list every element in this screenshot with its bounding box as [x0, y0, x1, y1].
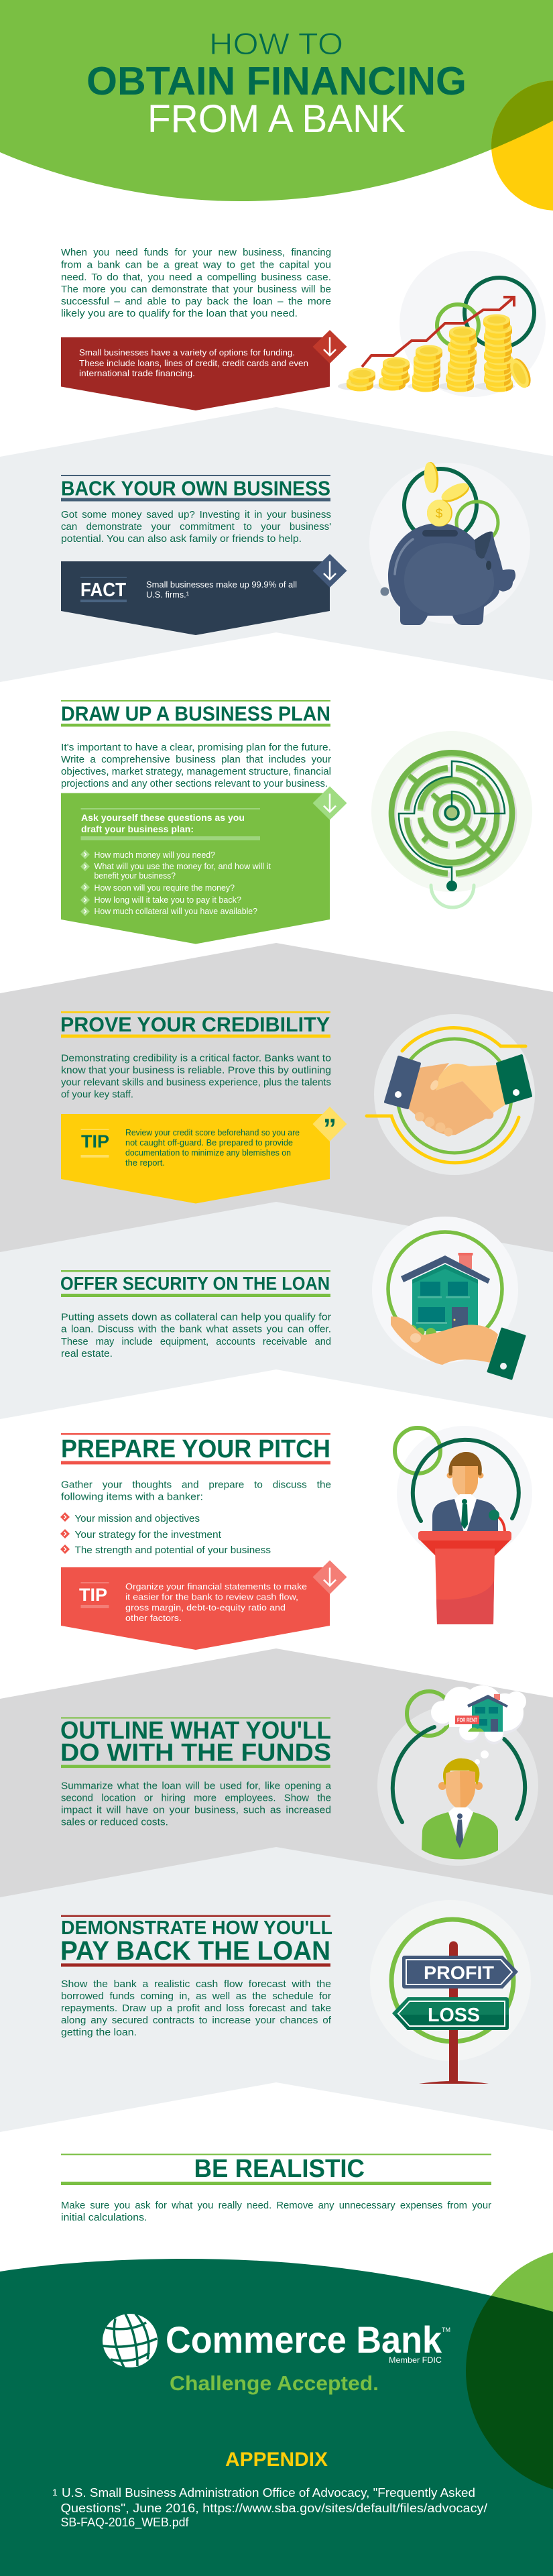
callout: questions checklist: Ask yourself these questions as you [81, 812, 245, 823]
body text: repayments. Draw up a profit and loss forecast and take [61, 2003, 331, 2014]
body text: know that your business is reliable. Prove this by outlining [61, 1065, 331, 1076]
callout: funding options: Small businesses have a variety of options for funding. [79, 347, 295, 357]
body text: It's important to have a clear, promising plan for the future. [61, 742, 331, 753]
panel: prove your credibility [60, 1011, 535, 1203]
callout: funding options: These include loans, lines of credit, credit cards and even [79, 358, 308, 368]
body text: Make sure you ask for what you really need. Remove any unnecessary expenses from your [61, 2200, 491, 2211]
callout: questions checklist: What will you use the money for, and how will it [94, 861, 271, 871]
icon: profit and loss signpost [370, 1900, 531, 2084]
bullet list: The strength and potential of your business [75, 1545, 271, 1556]
body text [61, 1053, 331, 1100]
intro text: When you need funds for your new business, financing [61, 247, 331, 258]
heading: PAY BACK THE LOAN [60, 1936, 330, 1966]
callout: tip credit score [61, 1107, 347, 1203]
body text: second location or hiring more employees. Show the [61, 1793, 331, 1804]
body text: following items with a banker: [61, 1492, 203, 1502]
callout: questions checklist: benefit your business? [94, 871, 176, 881]
panel: demonstrate how you'll pay back the loan [60, 1900, 531, 2084]
body text [61, 742, 331, 789]
body text: Demonstrating credibility is a critical factor. Banks want to [61, 1053, 331, 1064]
heading: BE REALISTIC [194, 2155, 365, 2183]
icon: profit and loss signpost: LOSS [428, 2005, 480, 2026]
body text: potential. You can also ask family or friends to help. [61, 534, 302, 545]
intro text: from a bank can be a great way to get the capital you [61, 260, 331, 271]
body text [61, 2200, 491, 2223]
body text: a loan. Discuss with the bank what assets you can offer. [61, 1324, 331, 1335]
callout: questions checklist: How much money will you need? [94, 850, 215, 860]
title [86, 27, 467, 141]
title: OBTAIN FINANCING [86, 59, 467, 103]
callout: tip credit score: the report. [125, 1158, 165, 1168]
callout: tip financial statements [61, 1560, 347, 1650]
bullet list [60, 1512, 271, 1556]
panel: introduction [61, 247, 546, 410]
heading: DEMONSTRATE HOW YOU'LL [61, 1917, 332, 1939]
heading: DRAW UP A BUSINESS PLAN [61, 702, 330, 726]
body text [61, 1781, 332, 1828]
callout: tip financial statements: Organize your financial statements to make [125, 1581, 307, 1591]
heading [60, 1717, 331, 1768]
icon: house in hand [372, 1217, 525, 1379]
intro text: The more you can demonstrate that your business will be [61, 284, 331, 295]
callout: funding options: international trade financing. [79, 368, 195, 378]
body text: These may include equipment, accounts receivable and [61, 1337, 331, 1347]
body text: objectives, market strategy, management structure, financial [61, 767, 331, 777]
callout: tip credit score: documentation to minimize any blemishes on [125, 1147, 291, 1158]
panel: prepare your pitch [60, 1426, 532, 1650]
callout: tip credit score: ” [323, 1114, 336, 1143]
body text: Gather your thoughts and prepare to discuss the [61, 1479, 331, 1490]
callout: questions checklist: How long will it take you to pay it back? [94, 895, 241, 905]
logo: Commerce Bank: Challenge Accepted. [170, 2371, 379, 2395]
icon: man thinking of rental house [377, 1685, 538, 1866]
heading: PREPARE YOUR PITCH [61, 1435, 330, 1463]
appendix heading: APPENDIX [225, 2449, 328, 2471]
body text: real estate. [61, 1349, 113, 1359]
heading: BACK YOUR OWN BUSINESS [61, 476, 330, 500]
body text [61, 1979, 332, 2038]
intro text [61, 247, 331, 319]
body text: of your key staff. [61, 1089, 133, 1100]
heading: OFFER SECURITY ON THE LOAN [60, 1273, 330, 1294]
icon: man thinking of rental house: FOR RENT [457, 1717, 477, 1724]
callout: fact: U.S. firms.¹ [146, 590, 190, 600]
callout: tip financial statements: TIP [79, 1585, 107, 1605]
footnote: SB-FAQ-2016_WEB.pdf [60, 2516, 189, 2530]
logo: Commerce Bank: Commerce Bank [166, 2318, 442, 2361]
body text [61, 1312, 331, 1359]
intro text: need. To do that, you need a compelling business case. [61, 272, 331, 283]
bullet list: Your strategy for the investment [75, 1530, 221, 1541]
body text: sales or reduced costs. [61, 1817, 168, 1828]
icon: coin stacks with rising arrow [338, 251, 546, 397]
intro text: successful – and able to pay back the loan – the more [61, 296, 331, 307]
callout: funding options [61, 330, 347, 410]
body text: Got some money saved up? Investing it in your business [61, 510, 331, 520]
header banner [0, 0, 553, 211]
body text: Summarize what the loan will be used for, like opening a [61, 1781, 332, 1792]
callout: fact [61, 554, 347, 635]
body text [61, 510, 331, 545]
panel: back your own business [61, 461, 530, 635]
icon: profit and loss signpost: PROFIT [424, 1962, 494, 1983]
callout: tip credit score: TIP [81, 1131, 109, 1152]
footnote: Questions", June 2016, https://www.sba.gov/sites/default/files/advocacy/ [60, 2502, 487, 2515]
panel: offer security on the loan [60, 1217, 525, 1379]
body text: projections and any other sections relevant to your business. [61, 779, 328, 789]
body text: borrowed funds coming in, as well as the schedule for [61, 1991, 331, 2002]
icon: handshake [367, 1014, 535, 1175]
callout: tip credit score: not caught off-guard. Be prepared to provide [125, 1137, 293, 1147]
callout: tip financial statements: it easier for the bank to review cash flow, [125, 1592, 298, 1602]
title: HOW TO [209, 27, 343, 61]
body text: Write a comprehensive business plan that includes your [61, 754, 331, 765]
callout: questions checklist: How much collateral will you have available? [94, 906, 257, 916]
body text [61, 1479, 331, 1502]
heading: DO WITH THE FUNDS [60, 1739, 331, 1767]
footnote: 1 [52, 2487, 58, 2498]
callout: tip financial statements: gross margin, debt-to-equity ratio and [125, 1603, 286, 1612]
heading [60, 1915, 332, 1966]
callout: tip credit score: Review your credit score beforehand so you are [125, 1127, 300, 1137]
body text: getting the loan. [61, 2027, 137, 2038]
body text: your relevant skills and business experience, plus the talents [61, 1077, 331, 1088]
heading: OUTLINE WHAT YOU'LL [60, 1717, 331, 1744]
logo: Commerce Bank [103, 2314, 450, 2395]
footnote [52, 2486, 487, 2530]
footnote: U.S. Small Business Administration Office of Advocacy, "Frequently Asked [62, 2486, 475, 2500]
icon: piggy bank [369, 461, 530, 625]
callout: questions checklist [61, 786, 347, 944]
panel: be realistic [61, 2153, 491, 2223]
body text: Putting assets down as collateral can help you qualify for [61, 1312, 331, 1323]
body text: can demonstrate your commitment to your business' [61, 522, 331, 533]
callout: questions checklist: draft your business plan: [81, 824, 194, 834]
logo: Commerce Bank: Member FDIC [389, 2355, 442, 2365]
title: FROM A BANK [147, 97, 406, 141]
callout: fact: FACT [80, 579, 126, 601]
body text: impact it will have on your business, such as increased [61, 1805, 331, 1816]
icon: presenter at podium [395, 1426, 532, 1624]
panel: outline what you'll do with the funds [60, 1685, 538, 1866]
intro text: likely you are to qualify for the loan that you need. [61, 309, 298, 319]
body text: along any secured contracts to increase your chances of [61, 2015, 332, 2026]
callout: tip financial statements: other factors. [125, 1613, 182, 1623]
callout: questions checklist: How soon will you require the money? [94, 883, 235, 893]
body text: initial calculations. [61, 2213, 147, 2223]
heading [61, 2153, 491, 2185]
heading: PROVE YOUR CREDIBILITY [60, 1013, 330, 1036]
icon: globe [103, 2314, 158, 2367]
logo: Commerce Bank: TM [442, 2327, 450, 2333]
icon: maze [371, 731, 532, 907]
bullet list: Your mission and objectives [75, 1514, 200, 1524]
callout: fact: Small businesses make up 99.9% of all [146, 579, 297, 590]
footer background [0, 2247, 553, 2576]
body text: Show the bank a realistic cash flow forecast with the [61, 1979, 331, 1990]
panel: draw up a business plan [61, 700, 532, 944]
icon: piggy bank: $ [436, 507, 443, 521]
